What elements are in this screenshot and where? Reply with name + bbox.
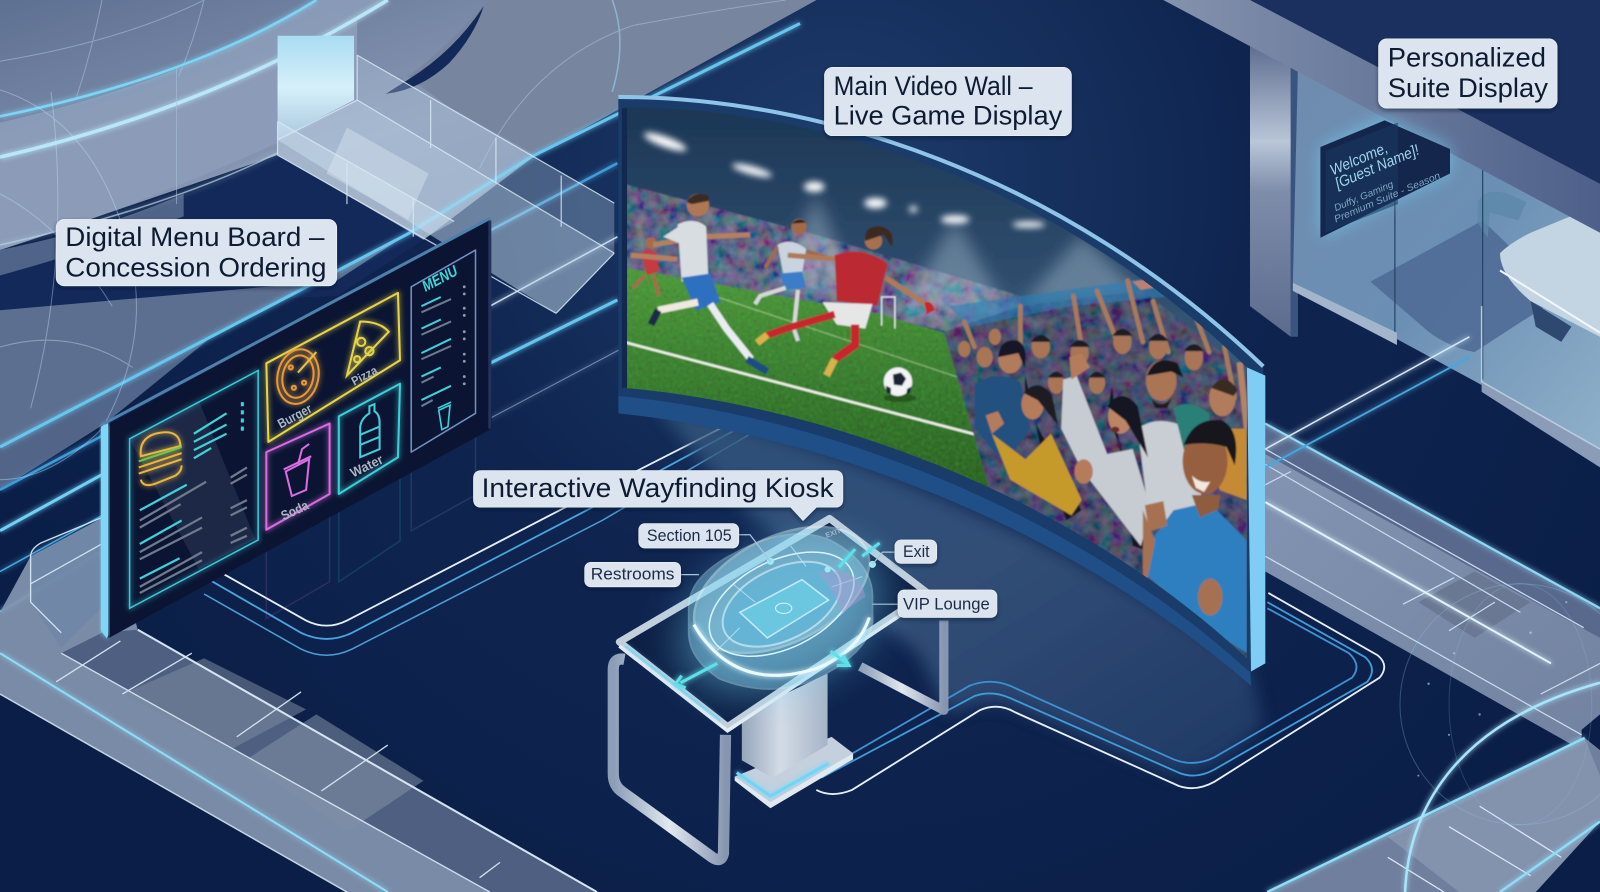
menu side panel: MENU: [419, 262, 461, 295]
glass catwalk: [278, 55, 614, 313]
distant stands: [627, 184, 1021, 332]
label: digital menu board: Digital Menu Board –: [65, 222, 325, 252]
label: restrooms: [585, 562, 681, 587]
menu side panel: [411, 250, 476, 452]
top-right suite: [1163, 0, 1600, 467]
right walkway: [1265, 337, 1600, 750]
nebula globe lower-right: [1400, 584, 1600, 892]
fan in orange: [1209, 362, 1247, 500]
nebula globe upper-left: [0, 90, 136, 480]
suite chair: [1478, 192, 1527, 238]
suite table: [1500, 204, 1600, 337]
floor circuit lines near menu board: [204, 408, 786, 655]
label: personalized suite display: Suite Display: [1388, 73, 1549, 103]
floodlights: [642, 129, 1045, 228]
board sheen: [130, 401, 255, 569]
suite welcome text: Premium Suite - Season: [1333, 170, 1442, 225]
label: main video wall: [824, 67, 1071, 136]
tiny map label: EXIT: [824, 527, 843, 540]
suite welcome text: Welcome,: [1328, 140, 1391, 179]
panel: interactive kiosk: [613, 501, 944, 860]
wall base band: [618, 392, 1251, 686]
icon: water bottle: [360, 404, 380, 457]
kiosk front leg frame: [613, 659, 726, 860]
floor circuit lines near kiosk: [816, 593, 1384, 794]
icon: burger: [139, 432, 182, 485]
fan in jacket: [974, 340, 1031, 464]
fan in white tee: [1138, 360, 1204, 531]
wall frame: [618, 97, 1265, 672]
kiosk back legs: [860, 621, 944, 710]
bottom-left walkway: [0, 515, 597, 892]
central column light: [278, 36, 354, 140]
label: main video wall: Live Game Display: [834, 101, 1063, 131]
soda panel: [266, 424, 330, 530]
suite welcome text: [Guest Name]!: [1332, 141, 1423, 193]
panel: digital menu board: [101, 218, 492, 639]
yellow food panel: Pizza: [349, 363, 380, 388]
icon: pizza slice: [347, 321, 389, 376]
label: section 105: [639, 524, 739, 548]
fan in teal: [1173, 403, 1210, 450]
label: vip lounge: VIP Lounge: [903, 595, 990, 613]
panel: personalized suite display: [1320, 116, 1450, 238]
label: exit: Exit: [903, 543, 930, 561]
icon: round pizza: [272, 345, 324, 408]
yellow food panel: Burger: [275, 401, 314, 431]
stadium banner: [949, 278, 1173, 327]
kiosk table top: [619, 518, 928, 727]
screen content: [624, 107, 1247, 658]
player red kit: [757, 226, 935, 376]
map arrows: [676, 543, 880, 688]
suite welcome text: [1328, 140, 1442, 225]
panel: main video wall: [612, 97, 1265, 686]
left menu panel: [130, 370, 258, 608]
label: interactive wayfinding kiosk: Interactive Wayfinding Kiosk: [482, 473, 834, 503]
label: digital menu board: Concession Ordering: [65, 253, 327, 283]
ceiling beam: [1163, 0, 1600, 233]
lower-right walkway: [1267, 738, 1600, 892]
callout lines: [681, 535, 898, 604]
label: restrooms: Restrooms: [591, 566, 674, 584]
label: personalized suite display: [1379, 39, 1557, 108]
board reflection: [266, 429, 476, 618]
player far: [755, 219, 827, 341]
hologram stadium: [657, 501, 906, 722]
crowd raised arms: [964, 281, 1235, 398]
right floor cross lines: [1265, 337, 1469, 467]
soccer ball: [884, 367, 916, 402]
player white kit: [631, 194, 767, 371]
suite welcome text: Duffy, Gaming: [1333, 179, 1396, 214]
water panel: Water: [348, 452, 386, 480]
fan in white sweater: [1061, 353, 1151, 551]
crowd mid heads: [958, 329, 1203, 394]
yellow food panel: [266, 293, 400, 442]
wall end strip: [1247, 367, 1265, 672]
pitch: [623, 267, 995, 490]
diagonal floor glow lines left: [0, 23, 800, 612]
fan in blue shirt: [1143, 420, 1247, 653]
label: digital menu board: [56, 219, 337, 286]
label: main video wall: Main Video Wall –: [834, 71, 1033, 101]
label: section 105: Section 105: [647, 527, 732, 545]
floor reflection glow below video wall: [653, 403, 1263, 776]
goal: [882, 297, 895, 329]
background player: [633, 237, 659, 296]
crowd background: [944, 291, 1247, 658]
label: vip lounge: [898, 590, 997, 617]
label: interactive wayfinding kiosk: [473, 470, 843, 521]
map marker dots: [767, 558, 876, 573]
suite floor mat: [1370, 220, 1561, 352]
water panel: [339, 384, 400, 494]
label: exit: [895, 540, 937, 563]
icon: small cup: [438, 402, 451, 430]
fan in yellow: [986, 376, 1082, 521]
ceiling glow arcs: [0, 0, 388, 245]
label: personalized suite display: Personalized: [1388, 42, 1546, 72]
ceiling structure top-left: [0, 0, 816, 490]
icon: soda cup: [284, 444, 311, 496]
kiosk pedestal: [735, 674, 853, 808]
soda panel: Soda: [279, 497, 311, 523]
